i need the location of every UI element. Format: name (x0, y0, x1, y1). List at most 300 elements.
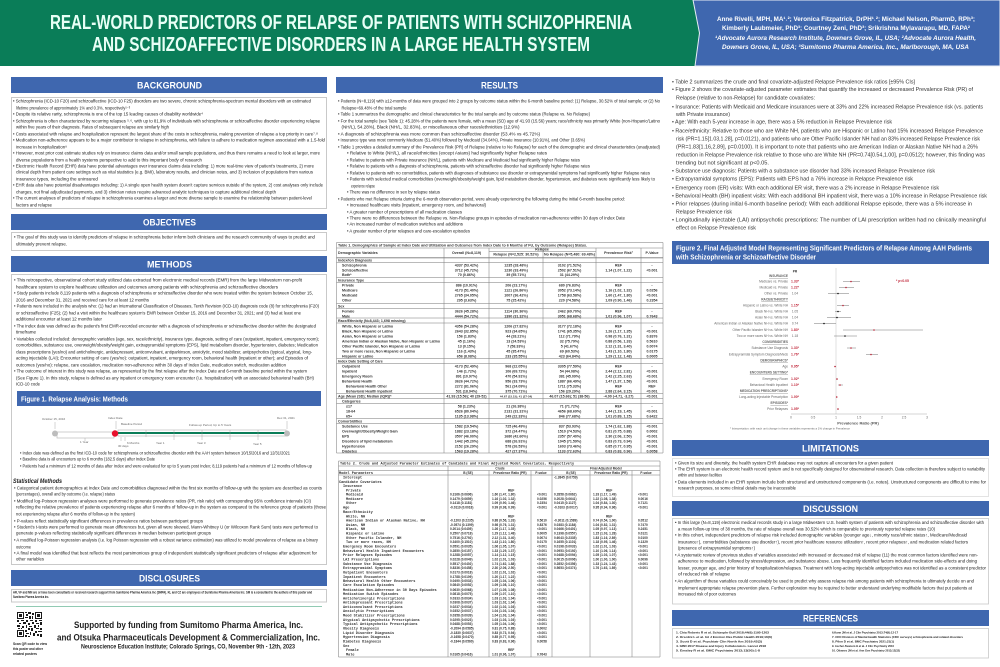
table 1: 4337 (53.42%) (455, 263, 479, 267)
table 2: Table 2. Crude and Adjusted Parameter Estimates of Candidate and Final Adjusted Model Covariates, Respectively (340, 462, 575, 467)
table 1: 381 (45.09%) (559, 374, 581, 378)
table 1: 3626 (45.28%) (455, 309, 479, 313)
table 1: 1582 (19.54%) (455, 424, 479, 428)
heading: limitations: LIMITATIONS (802, 444, 859, 454)
table 1: Index Date Setting of Care (338, 359, 383, 363)
table 1: 295 (3.63%) (457, 298, 477, 302)
chart: relapse timeline: 6 Months (127, 441, 140, 445)
table 1: Comorbidities (338, 419, 362, 423)
discussion text: lesser, younger age, and prior history of hospitalization/relapses. Treatment with long-acting injectable antipsychotics was not identified as a consistent predictor (678, 565, 986, 570)
results interpretation text: • Age: With each 5-year increase in age, there was a 5% reduction in Relapse Prevalence risk (672, 120, 892, 126)
table 2: 1.33 (1.29, 1.37) (492, 549, 515, 553)
results text: • Relative to patients with a diagnosis of schizophrenia, patients with schizoaffective disorder had significantly higher Relapse rates (347, 163, 591, 168)
table 2: 1.18 (0.95, 1.46) (593, 540, 616, 544)
results text: • Table 1 summarizes the demographic and clinical characteristics for the total sample and by outcome status (Relapse vs. No Relapse) (338, 111, 590, 116)
table 1: Race/Ethnicity (N=8,443; 1,698 missing) (338, 319, 406, 323)
discussion text: insurance↑), comorbidities (substance use disorder↑), recent prior healthcare resource utilization↑, recent prior relapses↑, and medication related factors (678, 539, 969, 544)
table 2: Diabetes Diagnosis (343, 639, 381, 644)
table 2: Extrapyramidal Symptoms (343, 566, 392, 571)
table 1: <0.001 (646, 389, 658, 393)
table 2: <0.001 (537, 570, 547, 574)
results text: • A greater number of prescriptions of all medication classes (347, 209, 463, 214)
methods text: or schizoaffective (F25); (2) had a visit within the healthcare system's EMR between October 15, 2016 and December 31, 2021; and (3) had at least one (16, 310, 301, 315)
table 1: Relapse (535, 248, 549, 252)
x-axis: 0 (790, 416, 792, 420)
table 2: 0.1398 (0.0557) (554, 531, 577, 535)
table 2: 0.0173 (0.0018) (450, 570, 473, 574)
table 2: B (SE) (463, 471, 473, 475)
discussion text: a mean follow-up time of 38 months, the rate of relapse overall was 30.52% which is comparable to previously reported relapse rates (10) (678, 526, 935, 531)
x-axis: Prevalence Ratio (PR) (837, 420, 879, 426)
table 2: 1.07 (1.05, 1.08) (492, 588, 515, 592)
y-axis labels: RACE/ETHNICITY (761, 298, 789, 302)
chart: relapse timeline: Year 5 (253, 442, 262, 446)
table 1: 39 (55.71%) (506, 273, 527, 277)
table 1: 44 (28.21%) (506, 334, 527, 338)
table 1: Behavioral Health Other (346, 384, 388, 388)
table 1: 2152 (26.29%) (455, 444, 479, 448)
table 2: Medication Switch Episodes (343, 592, 398, 597)
table 1: 45 (1.16%) (458, 339, 476, 343)
table 1: Disorders of lipid metabolism (342, 439, 393, 443)
confidence intervals (814, 282, 923, 409)
discussion text: of reduced risk of relapse (678, 571, 730, 576)
table 2: -0.2094 (0.0585) (450, 626, 474, 630)
table 1: 891 (10.97%) (456, 374, 478, 378)
table 1: Medicare (342, 288, 358, 292)
y-axis labels: Other Pacific Islander NH vs. White NH (733, 328, 789, 332)
table 2: 0.0121 (638, 531, 648, 535)
methods text: (See Figure 1). In this study, relapse is defined as any inpatient or emergency room encounter (i.e. hospitalization) with an associated behavioral health (BH) (16, 375, 314, 380)
statistical methods text: • Modified log-Poisson regression analyses were performed to generate prevalence ratios (PR, risk ratio) with corresponding 95% confidence intervals (CI) (14, 498, 311, 503)
table 1: Private (342, 283, 354, 287)
table 1: <0.001 (646, 424, 658, 428)
table 1: 1680 (42.60%) (504, 434, 529, 438)
discussion text: • In this large (N=8,119) electronic medical records study in a large Midwestern U.S. health system of patients with schizophrenia and schizoaffective disorder with (675, 520, 984, 525)
table 2: Obesity Diagnosis (343, 626, 379, 631)
table 1: 21 (26.38%) (506, 404, 527, 408)
table 1: 1.47 (1.37, 1.58) (605, 379, 632, 383)
figure 1 notes: • Index date was defined as the first ICD-10 code for schizophrenia or schizoaffective disorder with the AAH system between 10/15/2016 and 12/31/2021 (20, 450, 290, 455)
table 2: 0.0308 (0.0037) (450, 601, 473, 605)
PR values: 1.05* (791, 407, 800, 411)
table 1: 1206 (27.82%) (504, 324, 529, 328)
table 2: REF (508, 514, 514, 518)
statistical methods text: outcome (16, 544, 31, 549)
results text: • There were no differences between the Relapse vs. Non-Relapse groups in episodes of medication non-adherence within 30 days of Index Date (347, 215, 625, 220)
table 1: 1230 (33.49%) (504, 268, 529, 272)
table 2: <0.001 (638, 544, 648, 548)
table 2: <0.001 (537, 579, 547, 583)
PR values: 1.22* (791, 286, 800, 290)
results interpretation text: with Private insurance) (675, 112, 730, 118)
table 1: 0.0175 (646, 349, 658, 353)
results text: experience relapse (351, 183, 375, 188)
table 2: 0.0100 (638, 536, 648, 540)
results text: Relapse=69.48% of the total sample (342, 105, 407, 110)
PR values: 1.04 (792, 316, 798, 320)
table 1: 1758 (63.58%) (558, 293, 582, 297)
table 1: 1.29 (1.12, 1.48) (605, 354, 632, 358)
table 1: 1121 (26.86%) (504, 288, 528, 292)
table 1: 6526 (80.04%) (455, 409, 479, 413)
references text: 1. Chia Roberts R et al. Schizophr Bull 2018;44(6):1195-1203 (676, 630, 769, 634)
funding statement (57, 620, 320, 650)
funding statement: Neuroscience Education Institute; Colorado Springs, CO, November 9th - 12th, 2023 (81, 644, 296, 650)
table 1: Sex (338, 304, 344, 308)
background text: • EHR data also have potential disadvantages including: 1) A single open health system doesn't capture services outside of the system, 2) cost analyses only include (13, 182, 323, 187)
table 1: 1.74 (1.62, 1.88) (605, 424, 632, 428)
table 2: 1.02 (1.01, 1.02) (492, 570, 515, 574)
table 2: -0.3011 (0.1589) (554, 519, 577, 523)
table 2: 1.05 (1.04, 1.06) (492, 579, 515, 583)
results text: • A diagnosis of schizophrenia was more common than schizoaffective disorder (53.4% vs 45.72%) (338, 131, 540, 136)
table 1: 206 (23.17%) (505, 283, 528, 287)
table 1: 3305 (77.59%) (558, 364, 582, 368)
table 2: B (SE) (566, 471, 576, 475)
table 1: 3712 (45.72%) (455, 268, 479, 272)
table 2: 0.0630 (0.0068) (450, 588, 473, 592)
table 1: 561 (24.09%) (505, 384, 528, 388)
table 1: 1045 (71.59%) (558, 439, 582, 443)
table 1: 0.85 (0.77, 0.95) (605, 444, 632, 448)
table 1: 112 (71.79%) (559, 334, 581, 338)
table 1: 1563 (19.28%) (455, 449, 479, 453)
background text: diverse populations from a health systems perspective to add to this important body of research (16, 157, 202, 162)
table 1: 45 (35.47%) (506, 349, 527, 353)
table 1: 71 (71.72%) (560, 404, 580, 408)
table 1: 5 (41.67%) (561, 344, 579, 348)
table 1: Hispanic or Latino (342, 354, 374, 358)
table 2: Typical Antipsychotic Prescriptions (343, 622, 418, 627)
table 2: 0.2028 (0.0641) (554, 497, 577, 501)
table 1: Age (Mean (SD); Median (IQR))* (338, 394, 392, 398)
table 2: 1.33 (1.24, 1.43) (593, 562, 616, 566)
table 2: 0.0237 (0.0034) (450, 605, 473, 609)
table 2: 1.05 (1.04, 1.06) (492, 622, 515, 626)
table 2: 1.01 (0.96, 1.07) (492, 652, 515, 656)
background text: • Schizophrenia (ICD-10 F20) and schizoaffective (ICD-10 F25) disorders are two severe, chronic schizophrenia-spectrum mental disorders with an estimated (13, 98, 311, 103)
table 1: 846 (77.68%) (559, 414, 581, 418)
table 1: 233 (35.55%) (505, 354, 528, 358)
y-axis labels: Medicare vs. Private (759, 280, 788, 284)
table 2: 0.1655 (0.1101) (554, 540, 576, 544)
table 1: 578 (26.53%) (505, 444, 528, 448)
background text: increase in hospitalization⁹ (16, 144, 67, 149)
table 1: EPS (342, 434, 350, 438)
background text: charges, not final adjudicated payments, and 3) clinician notes require advanced analytic techniques to capture additional clinical depth (16, 189, 276, 194)
references text (676, 630, 963, 652)
methods text: comorbidities, substance use, overweight/obesity/weight gain, extrapyramidal symptoms (EPS), lipid metabolism disorder, hypertension, diabetes; Medication (16, 342, 318, 347)
table 1: <0.001 (646, 329, 658, 333)
table 2: Behavioral Health Other Encounters (343, 579, 415, 584)
table 1: 41.93 (15.56); 40 (29-52) (446, 394, 487, 398)
table 1: 2462 (69.70%) (558, 309, 582, 313)
methods text: • The index date was defined as the patient's first EMR-recorded encounter with a diagnosis of schizophrenia or schizoaffective disorder within the designated (14, 323, 316, 328)
table 2: 0.5517 (0.0402) (450, 562, 473, 566)
table 2: 1.14 (1.12, 1.15) (492, 553, 515, 557)
table 1: 2643 (32.85%) (455, 329, 479, 333)
discussion text: • In this cohort, independent predictors of relapse risk included demographic variables (younger age↓, minority race/ethnic status↑, Medicare/Medicaid (675, 532, 967, 537)
methods text: • The outcome of interest in this study was relapse, as represented by the first relapse after the Index Date and 6-month baseline period within the system (14, 368, 307, 373)
panel: results (336, 77, 663, 233)
table 2: 1.02 (1.02, 1.03) (492, 605, 515, 609)
methods text: • This retrospective, observational cohort study utilized data extracted from electronic medical records (EMR) from the large Midwestern non-profit (14, 277, 303, 282)
table 1: 1133 (72.63%) (558, 449, 582, 453)
table 2: American Indian or Alaskan Native, NH (346, 519, 425, 524)
table 1: 1603 (73.46%) (558, 444, 582, 448)
background text: lifetime prevalence of approximately 1% and 0.3%, respectively¹⁻³ (16, 105, 130, 110)
table 2: 0.2451 (638, 527, 648, 531)
table 1: Medicaid (342, 293, 357, 297)
chart: relapse timeline: Dec 31, 2021 (277, 416, 295, 420)
table 2: <0.001 (537, 562, 547, 566)
table 2: 1.00 (1.00, 1.00) (593, 557, 616, 561)
table 2: Atypical Antipsychotic Prescriptions (343, 618, 420, 623)
results text: • An increased number of medication switches and additions (347, 221, 464, 226)
limitations text: • Data elements included in an EHR system include both structured and unstructured components (i.e. notes). Unstructured components are difficult to mine for (675, 479, 986, 484)
table 2: 1.16 (1.02, 1.32) (492, 497, 515, 501)
authors: ¹Advocate Aurora Research Institute, Downers Grove, IL, USA; ²Advocate Aurora Health, (715, 35, 976, 42)
heading: references: REFERENCES (803, 614, 858, 624)
table 2: <0.001 (638, 566, 648, 570)
limitations text (675, 460, 986, 490)
table 1: 0.0074 (646, 344, 658, 348)
table 2: 0.0466 (0.0401) (554, 527, 577, 531)
table 2: 1.02 (1.01, 1.03) (593, 544, 616, 548)
title (50, 11, 632, 56)
table 2: 0.2014 (0.0405) (450, 527, 473, 531)
table 1: 58 (1.23%) (458, 404, 476, 408)
table 1: 69 (60.53%) (560, 349, 580, 353)
chart: relapse timeline: Follow-up Period, Up to 5 Years (189, 423, 232, 427)
table 2: . (467, 514, 468, 518)
references text: 4. GBD 2017 Disease and Injury Collaborators. Lancet 2018 (676, 644, 766, 648)
authors: Anne Rivelli, MPH, MA¹˒²; Veronica Fitzpatrick, DrPH¹˒²; Michael Nelson, PharmD, RPh³; (717, 16, 975, 23)
results interpretation text: • Table 2 summarizes the crude and final covariate-adjusted Relapse Prevalence risk ratios [±95% CIs] (672, 80, 915, 86)
statistical methods text: • A modified log-Poisson regression analysis (i.e. log Poisson regression with a robust variance estimation) was utilized to model prevalence of relapse as a binary (14, 537, 319, 542)
table 2: REF (606, 488, 612, 492)
references text: 3. Scott D et al. Psychiatr Clin North Am 2019;42(3) (676, 639, 762, 643)
table 1: 18-64 (346, 409, 355, 413)
figure 2 footnote: * Interpretation: with each unit change in these variables represents a 1% change in Prevalence (730, 426, 850, 430)
heading: results: RESULTS (481, 80, 518, 90)
QR caption: Scan QR code to view (13, 642, 47, 646)
table 2: 0.2507 (0.0718) (450, 531, 473, 535)
table 1: -4.00 (-4.71, -3.27) (604, 394, 634, 398)
table 1: <0.001 (646, 268, 658, 272)
table 2: Male (346, 652, 355, 657)
table 1: Table 1. Demographics of Sample at Index Date and Utilization and Outcomes from Index Date to 6 Months of FU, by Outcome (Relapse) Status. (338, 242, 587, 248)
disclosures text (13, 590, 312, 599)
y-axis labels: Medicaid vs. Private (759, 286, 788, 290)
table 1: 0.0002 (646, 429, 658, 433)
results interpretation text: effect on Relapse Prevalence risk (676, 226, 756, 232)
table 2: Black, NH (346, 527, 365, 532)
background text: • Schizophrenia is often characterized by recurring relapses ⁵˒⁶, with up to 81.9% of individuals with schizophrenia or schizoaffective disorder experiencing relapse (13, 118, 320, 123)
table 1: ≤17 (346, 404, 352, 408)
table 1: 3052 (73.14%) (558, 288, 582, 292)
chart: relapse timeline: 30 days (118, 444, 129, 448)
y-axis labels: Hispanic or Latino vs. White NH (743, 304, 789, 308)
references text: 2. Orsolini L et al. Int J Environ Res Public Health 2019;16(6) (676, 635, 772, 639)
table 2: 1.10 (1.06, 1.14) (593, 549, 616, 553)
chart: forest plot of prevalence ratios (714, 268, 928, 430)
table 1: 2272 (81.06%) (455, 384, 479, 388)
table 1: 146 (1.72%) (457, 369, 477, 373)
table 2: -0.1830 (0.0637) (450, 631, 474, 635)
table 2: 1.06 (1.05, 1.07) (492, 544, 515, 548)
table 2: 1.03 (1.03, 1.04) (492, 596, 515, 600)
table 1: 2357 (57.40%) (558, 434, 582, 438)
table 2: P-value (640, 471, 652, 475)
table 2: 0.8376 (537, 523, 547, 527)
table 1: 725 (46.49%) (505, 424, 528, 428)
table 2: -0.1658 (0.0470) (450, 635, 474, 639)
table 1: 1.01 (0.89, 1.15) (605, 414, 632, 418)
table 1: <0.001 (646, 409, 658, 413)
y-axis labels: Prior Relapses (767, 407, 788, 411)
table 2: 0.0228 (0.0049) (450, 557, 473, 561)
table 1: Black, Non Hispanic or Latino (342, 329, 394, 333)
title: AND SCHIZOAFFECTIVE DISORDERS IN A LARGE HEALTH SYSTEM (92, 33, 590, 56)
statistical methods text: • A final model was identified that best reflects the most parsimonious group of independent statistically significant predictors of relapse after adjustment for (14, 550, 317, 555)
table 1: 0.2354 (646, 298, 658, 302)
table 1: 837 (53.93%) (559, 424, 581, 428)
table 2: Other (346, 501, 357, 506)
table 1: 3102 (71.52%) (558, 263, 582, 267)
chart: relapse timeline: October 15, 2016 (42, 417, 66, 421)
background text: insurance types, including the uninsured (16, 176, 98, 181)
table 1: REF (615, 309, 623, 313)
table 2: 0.0415 (0.1127) (554, 501, 576, 505)
table 2: 0.0016 (638, 497, 648, 501)
table 2: Behavioral Health Inpatient Encounters (343, 549, 424, 554)
table 2: 0.6043 (0.2335) (554, 536, 577, 540)
table 1: 0.7643 (646, 314, 658, 318)
panel: references (672, 610, 989, 658)
table 2: <0.001 (537, 613, 547, 617)
PR values: 1.15* (791, 304, 800, 308)
QR caption: related posters (13, 652, 37, 656)
table 2: 0.0488 (0.0094) (554, 553, 577, 557)
table 1: Prevalence Risk² (604, 251, 634, 255)
table 1: 1.60 (1.47, 1.80) (605, 293, 632, 297)
table 1: 249 (22.33%) (505, 414, 528, 418)
PR values: 1.10* (791, 383, 800, 387)
table 2: <0.001 (537, 493, 547, 497)
table 2: <0.001 (537, 588, 547, 592)
table 1: 54 (44.08%) (560, 369, 580, 373)
x-axis: 3 (926, 416, 928, 420)
table 1: 1711 (75.33%) (558, 384, 582, 388)
QR caption: this poster and other (13, 647, 44, 651)
table 2: <0.001 (537, 592, 547, 596)
background text: • Medication non-adherence appears to be a major contributor to relapse in schizophrenia, with failure to adhere to medication regimen associated with a 1.5-fold (13, 137, 325, 142)
table 1: 1887 (66.49%) (558, 379, 582, 383)
chart: relapse timeline: 1 Year (80, 440, 89, 444)
table 2: . (467, 476, 468, 480)
table 1: 3177 (72.18%) (558, 324, 582, 328)
results interpretation text: • Longitudinally injectable (LAI) antipsychotic prescriptions: The number of LAI prescription written had no clinically meaningful (672, 218, 986, 224)
table 1: 1.44 (1.19, 1.45) (605, 409, 632, 413)
results text: • Increased healthcare visits (inpatient, emergency room, and behavioral) (347, 202, 486, 207)
table 1: P-Value (646, 251, 658, 255)
table 2: 0.0512 (638, 519, 648, 523)
table 1: Behavioral Health (342, 379, 372, 383)
limitations text: • Given its size and diversity, the health system EHR database may not capture all encounters for a given patient (675, 460, 894, 465)
table 2: 0.1329 (638, 540, 648, 544)
table 2: 2.12 (1.31, 3.40) (492, 536, 515, 540)
statistical methods text: other variables (16, 556, 45, 561)
table 2: Prevalence Ratio (PR) (594, 471, 628, 475)
table 2: 1.26 (1.17, 1.35) (492, 527, 515, 531)
table 1: - (651, 404, 653, 408)
table 2: 1.04 (0.84, 1.30) (593, 501, 616, 505)
table 1: 220 (74.58%) (559, 298, 581, 302)
PR values: 1.04 (792, 292, 798, 296)
table 1: 70 (0.86%) (458, 273, 476, 277)
table 2: 2.30 (2.06, 2.50) (492, 566, 515, 570)
table 1: 1442 (45.20%) (455, 439, 479, 443)
table 1: 2.30 (2.06, 2.50) (605, 434, 632, 438)
table 2: 0.0383 (0.1184) (554, 523, 576, 527)
table 1: Overweight/Obesity/Weight Gain (342, 429, 398, 433)
table 2: . (467, 648, 468, 652)
table 2: 0.85 (0.77, 0.95) (492, 635, 515, 639)
table 1 (336, 242, 663, 453)
table 1: 13 (24.53%) (506, 339, 527, 343)
results interpretation text: • Behavioral Health (BH) inpatient visits: With each additional BH inpatient visit, there was a 10% increase in Relapse Prevalence risk (672, 194, 987, 200)
x-axis: 1 (835, 416, 837, 420)
table 2: 0.0175 (537, 540, 547, 544)
table 2: . (467, 488, 468, 492)
table 2: Age (343, 506, 349, 510)
heading: discussion: DISCUSSION (803, 504, 858, 514)
table 2: <0.001 (537, 631, 547, 635)
table 2: 0.0295 (0.0023) (450, 618, 473, 622)
table 2: Race/Ethnicity (343, 510, 374, 515)
chart: relapse timeline: Year 1 (156, 441, 165, 445)
methods text: ICD-10 code (16, 381, 40, 386)
panel: figure 2 (672, 241, 989, 430)
y-axis labels: Long-acting Injectable Prescription (739, 395, 788, 399)
table 2: <0.001 (537, 583, 547, 587)
table 1: <0.001 (646, 439, 658, 443)
table 1: 0.98 (0.76, 1.31) (605, 334, 632, 338)
table 1: 2131 (31.31%) (504, 409, 529, 413)
methods text: timeframe (16, 329, 36, 334)
table 1: 0.83 (0.83, 0.96) (605, 449, 632, 453)
results text: • Patients with selected medical comorbidities (overweight/obesity/weight gain, lipid metabolism disorder, hypertension, and diabetes were significantly less likely to (347, 176, 655, 181)
table 2: Final Adjusted Model (590, 466, 622, 470)
table 1: Other (342, 298, 352, 302)
table 1: 2.44 (2.12, 2.81) (605, 369, 632, 373)
x-axis: 0.5 (811, 416, 815, 420)
table 2: 0.2852 (0.0356) (554, 562, 577, 566)
table 2: <0.001 (638, 562, 648, 566)
table 2: 1.05 (0.97, 1.13) (593, 527, 616, 531)
table 1: 2765 (34.05%) (455, 293, 479, 297)
methods text: acting injectable (LAI); Encounter setting of care (yes/no): outpatient, inpatient, emergency room, behavioral health (inpatient or other); and Episodes of (16, 355, 309, 360)
results interpretation text: • Extrapyramidal symptoms (EPS): Patients with EPS had a 76% increase in Relapse Prevalence risk (672, 177, 913, 183)
PR values: 1.00* (791, 395, 800, 399)
x-axis (790, 416, 928, 426)
table 1: - (651, 309, 653, 313)
table 2: Outpatient Encounters (343, 570, 388, 575)
y-axis labels (714, 274, 789, 411)
table 1: White, Non Hispanic or Latino (342, 324, 394, 328)
